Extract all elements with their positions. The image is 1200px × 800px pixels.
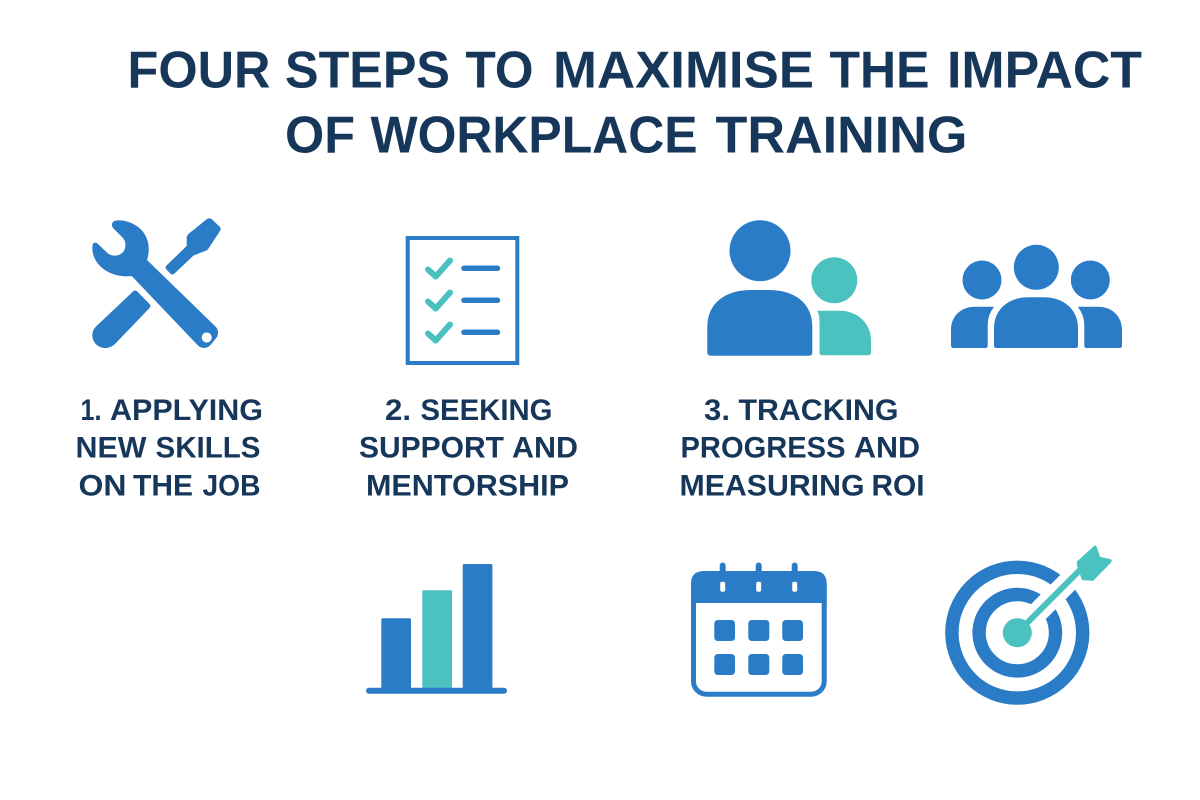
icon: checklist	[408, 238, 517, 363]
label: step 1: THE	[133, 470, 193, 503]
label: step 3: ROI	[872, 470, 924, 503]
label: step 3: PROGRESS	[680, 432, 846, 465]
label: step 2: MENTORSHIP	[366, 470, 569, 503]
icon: team of three	[951, 245, 1122, 348]
label: step 1: APPLYING	[110, 394, 263, 427]
label: step 2: 2.	[385, 394, 411, 427]
title: TRAINING	[716, 106, 968, 164]
title: MAXIMISE	[553, 41, 814, 99]
label: step 3: AND	[854, 432, 920, 465]
title: IMPACT	[947, 41, 1142, 99]
icon: person with mentee	[707, 220, 871, 356]
title: FOUR	[128, 41, 270, 99]
title: OF	[285, 106, 355, 164]
label: step 1: JOB	[202, 470, 260, 503]
label: step 1: 1.	[80, 394, 102, 427]
title	[128, 41, 1142, 164]
label: step 2	[359, 394, 578, 503]
label: step 2: AND	[512, 432, 578, 465]
title: TO	[466, 41, 534, 99]
icon: target with arrow	[952, 545, 1112, 698]
label: step 3: TRACKING	[738, 394, 898, 427]
label: step 1: NEW	[76, 432, 147, 465]
title: THE	[830, 41, 930, 99]
label: step 1: ON	[78, 470, 126, 503]
icon: bar chart	[369, 564, 504, 691]
title: STEPS	[285, 41, 450, 99]
title: WORKPLACE	[370, 106, 698, 164]
label: step 2: SUPPORT	[359, 432, 504, 465]
label: step 3: MEASURING	[680, 470, 864, 503]
label: step 2: SEEKING	[420, 394, 552, 427]
icon: wrench and screwdriver	[92, 218, 221, 348]
label: step 1: SKILLS	[156, 432, 260, 465]
label: step 1	[76, 394, 263, 503]
label: step 3	[680, 394, 924, 503]
label: step 3: 3.	[704, 394, 730, 427]
icon: calendar	[691, 566, 827, 694]
